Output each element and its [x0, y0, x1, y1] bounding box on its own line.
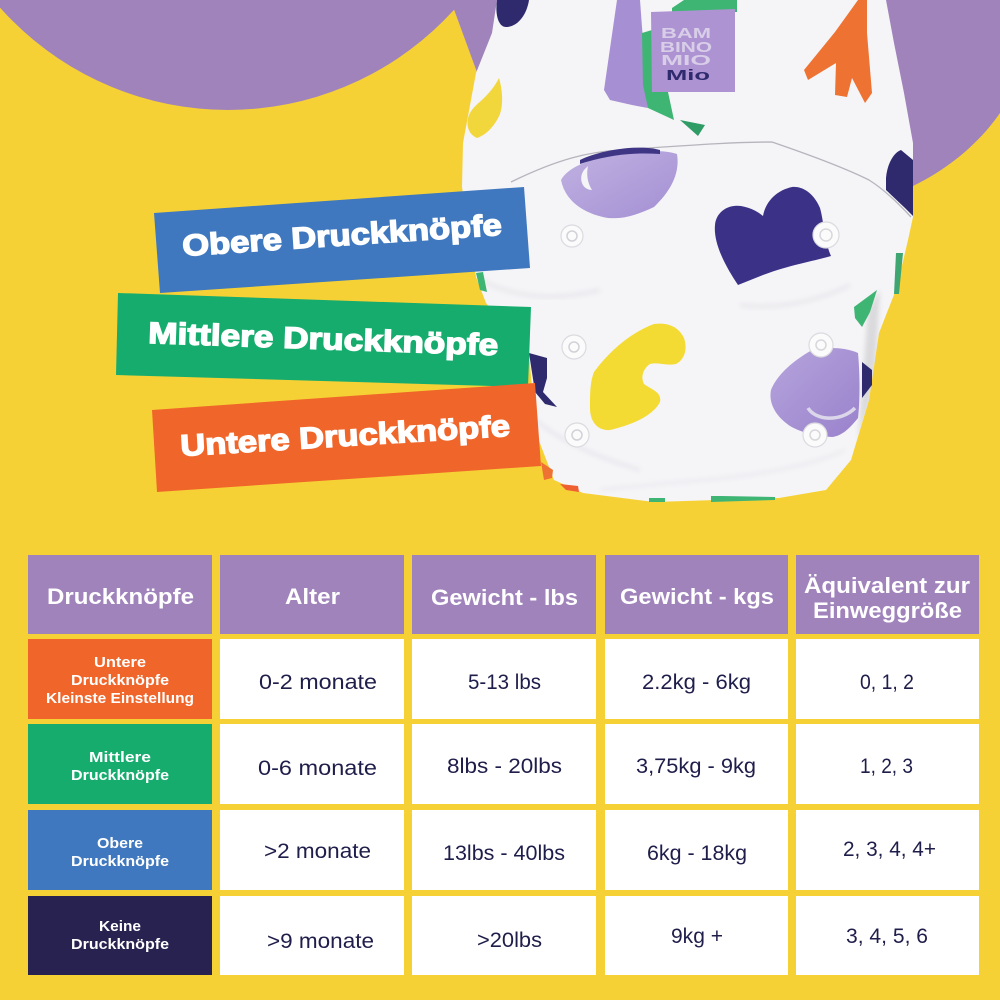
row label: Untere [28, 639, 212, 719]
row label: Untere: Druckknöpfe [71, 672, 169, 689]
cell: 2.2kg - 6kg [605, 639, 788, 719]
print: orange bottom left [541, 462, 553, 480]
print: navy edge strip on fold [580, 148, 660, 164]
diaper body [462, 0, 913, 502]
cell: >20lbs: >20lbs [477, 929, 542, 952]
print: green strap [642, 30, 674, 120]
print: purple trapezoid [604, 0, 648, 108]
cell: >2 monate: >2 monate [264, 840, 371, 863]
brand text: MIO [661, 52, 712, 69]
cell: 0-6 monate: 0-6 monate [258, 757, 377, 780]
print: green right side [854, 290, 877, 327]
brand tab [651, 9, 735, 92]
row label: Untere: Untere [94, 654, 146, 671]
snap: middle right [809, 333, 833, 357]
header: Alter: Alter [285, 584, 340, 609]
brand text: BINO [660, 39, 712, 56]
purple shape behind diaper [448, 0, 1000, 186]
row label: Keine: Keine [99, 918, 141, 935]
row label: Obere [28, 810, 212, 890]
header: Äquivalent zur Einweggröße: Einweggröße [813, 598, 962, 623]
snap: lower left [565, 423, 589, 447]
cell: 3,75kg - 9kg [605, 724, 788, 804]
cell: 0-2 monate: 0-2 monate [259, 671, 377, 694]
waist fold line [511, 142, 911, 217]
print: small green below fold [680, 120, 705, 136]
row label: Keine: Druckknöpfe [71, 936, 169, 953]
cell: >20lbs [412, 896, 596, 975]
row label: Mittlere: Mittlere [89, 749, 151, 766]
cell: 0, 1, 2 [796, 639, 979, 719]
banner: Obere Druckknöpfe [154, 187, 530, 293]
row label: Obere: Druckknöpfe [71, 853, 169, 870]
banner: Mittlere Druckknöpfe [116, 293, 531, 387]
print: purple bean [561, 151, 678, 218]
row label: Mittlere: Druckknöpfe [71, 767, 169, 784]
row label: Mittlere [28, 724, 212, 804]
row label: Obere: Obere [97, 835, 143, 852]
print: orange heart [804, 0, 872, 103]
header: Druckknöpfe [28, 555, 212, 634]
cell: 3, 4, 5, 6: 3, 4, 5, 6 [846, 925, 928, 948]
brand text: BAM [661, 25, 711, 42]
cell: 8lbs - 20lbs [412, 724, 596, 804]
cell: 13lbs - 40lbs: 13lbs - 40lbs [443, 842, 565, 865]
cell: 8lbs - 20lbs: 8lbs - 20lbs [447, 755, 562, 778]
print: navy blob top [496, 0, 529, 27]
print: navy left shape [529, 353, 557, 407]
cell: 2, 3, 4, 4+ [796, 810, 979, 890]
brand text [660, 25, 712, 84]
banner: Untere Druckknöpfe [152, 383, 541, 492]
print: pale arc in purple blob [808, 408, 855, 418]
print: purple blob right [770, 348, 860, 437]
print: yellow shape left [467, 78, 502, 138]
cell: 5-13 lbs: 5-13 lbs [468, 671, 541, 694]
print: green strip above tab [672, 0, 737, 14]
print: navy right mark [862, 362, 872, 398]
tab background [651, 9, 735, 92]
print: green bottom left [649, 498, 665, 502]
cell: 2, 3, 4, 4+: 2, 3, 4, 4+ [843, 838, 936, 861]
cell: 0-6 monate [220, 724, 404, 804]
cell: 9kg +: 9kg + [671, 925, 723, 948]
header: Gewicht lbs [412, 555, 596, 634]
cell: 5-13 lbs [412, 639, 596, 719]
banner: Mittlere Druckknöpfe: Mittlere Druckknöpfe [148, 317, 499, 362]
cell: 2.2kg - 6kg: 2.2kg - 6kg [642, 671, 751, 694]
print: orange bottom stripe [560, 484, 579, 492]
cell: 9kg + [605, 896, 788, 975]
cell: 1, 2, 3 [796, 724, 979, 804]
header: Gewicht lbs: Gewicht - lbs [431, 585, 578, 610]
header: Alter [220, 555, 404, 634]
header: Druckknöpfe: Druckknöpfe [47, 584, 194, 609]
banner: Untere Druckknöpfe: Untere Druckknöpfe [179, 410, 511, 463]
cell: 3, 4, 5, 6 [796, 896, 979, 975]
cell: >2 monate [220, 810, 404, 890]
print: green mark at left edge [476, 272, 487, 292]
snap: lower right [803, 423, 827, 447]
banner: Obere Druckknöpfe: Obere Druckknöpfe [181, 209, 503, 263]
cell: 3,75kg - 9kg: 3,75kg - 9kg [636, 755, 756, 778]
cell: 13lbs - 40lbs [412, 810, 596, 890]
cell: >9 monate: >9 monate [267, 930, 374, 953]
snap: upper left [561, 225, 583, 247]
row label: Untere: Kleinste Einstellung [46, 690, 194, 707]
cell: 0, 1, 2: 0, 1, 2 [860, 671, 914, 694]
purple circle top left [0, 0, 533, 110]
row label: Keine [28, 896, 212, 975]
print: green edge right [894, 253, 903, 294]
header: Gewicht kgs: Gewicht - kgs [620, 584, 774, 609]
print: navy shape at right edge [886, 150, 913, 216]
cell: >9 monate [220, 896, 404, 975]
snap: upper right [813, 222, 839, 248]
header: Äquivalent zur Einweggröße: Äquivalent zur [804, 573, 970, 598]
cell: 0-2 monate [220, 639, 404, 719]
cell: 1, 2, 3: 1, 2, 3 [860, 755, 913, 778]
cell: 6kg - 18kg: 6kg - 18kg [647, 842, 747, 865]
snap: middle left [562, 335, 586, 359]
print: navy heart [715, 187, 831, 285]
print: green bottom right [711, 496, 775, 502]
print: yellow C shape [590, 324, 686, 430]
header: Gewicht kgs [605, 555, 788, 634]
size table [28, 555, 979, 975]
cell: 6kg - 18kg [605, 810, 788, 890]
header: Äquivalent zur Einweggröße [796, 555, 979, 634]
diaper photo illustration [462, 0, 913, 502]
brand text: Mio [666, 67, 710, 84]
